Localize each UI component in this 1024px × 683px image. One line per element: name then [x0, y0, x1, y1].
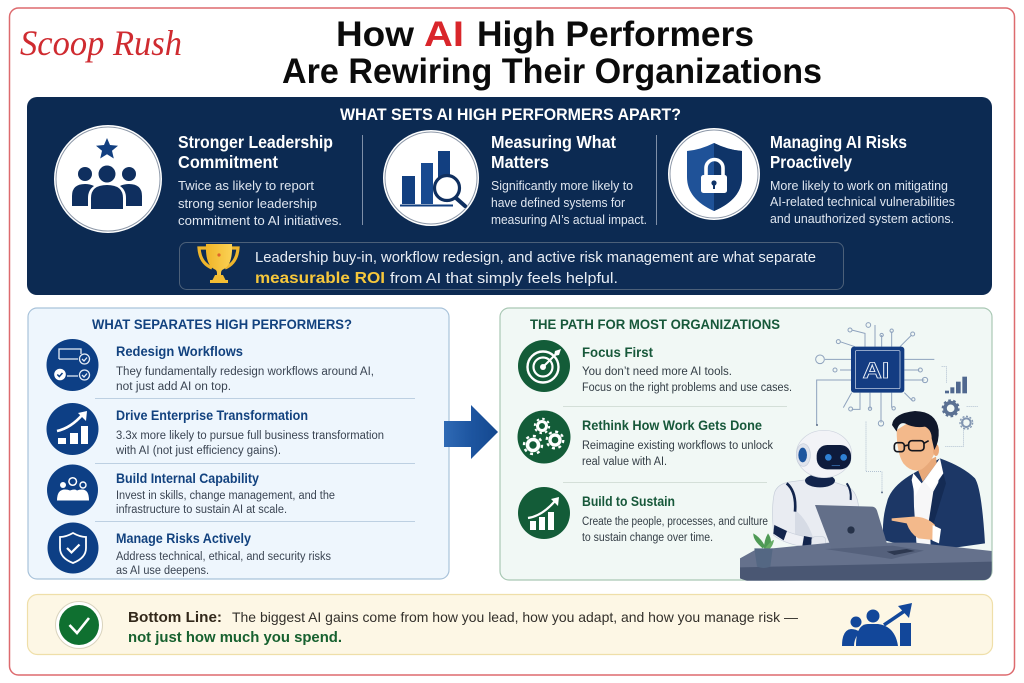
- item: drive enterprise transformation: with AI (not just efficiency gains).: [115, 445, 281, 457]
- title: [282, 15, 822, 91]
- icon: growth chart: [518, 487, 570, 539]
- bottom line text: [128, 609, 798, 646]
- item: build to sustain: Build to Sustain: [582, 493, 675, 509]
- block: stronger leadership commitment: strong senior leadership: [178, 196, 317, 211]
- item: build internal capability: infrastructure to sustain AI at scale.: [116, 504, 287, 516]
- mini bars: [945, 377, 967, 393]
- chip: [851, 347, 904, 393]
- illustration: robot and businessman with AI chip: AI: [863, 358, 889, 383]
- callout: measurable ROI: from AI that simply feels helpful.: [390, 270, 618, 287]
- icon: target: [518, 340, 570, 392]
- icon: trophy: [199, 244, 238, 283]
- block: stronger leadership commitment: Commitment: [178, 152, 278, 172]
- block: managing AI risks proactively: More likely to work on mitigating: [770, 178, 948, 193]
- item: build to sustain: Create the people, processes, and culture: [582, 516, 768, 528]
- item: focus first: [582, 344, 792, 394]
- panel: what sets AI high performers apart: [27, 97, 992, 295]
- icon: shield check: [48, 522, 98, 574]
- title: Are Rewiring Their Organizations: [282, 52, 822, 91]
- item: rethink how work gets done: real value with AI.: [582, 456, 667, 468]
- item: build internal capability: [116, 471, 335, 516]
- item: manage risks actively: as AI use deepens.: [116, 565, 209, 577]
- icon: bar chart with magnifier: [383, 130, 479, 226]
- icon: team: [47, 464, 98, 516]
- title: High Performers: [477, 15, 754, 54]
- panel: what separates high performers: [28, 308, 449, 579]
- item: build to sustain: to sustain change over time.: [582, 532, 713, 544]
- item: manage risks actively: [116, 531, 331, 577]
- icon: check mark: [56, 602, 102, 648]
- item: manage risks actively: Address technical, ethical, and security risks: [116, 551, 331, 563]
- item: build internal capability: Build Internal Capability: [116, 471, 259, 486]
- item: drive enterprise transformation: [115, 408, 384, 457]
- plant: [753, 533, 774, 568]
- block: managing AI risks proactively: and unauthorized system actions.: [770, 211, 954, 226]
- callout: measurable ROI: [180, 242, 844, 290]
- item: rethink how work gets done: Reimagine existing workflows to unlock: [582, 440, 773, 452]
- icon: growth chart: [46, 403, 98, 455]
- block: measuring what matters: measuring AI’s actual impact.: [491, 212, 647, 227]
- item: rethink how work gets done: Rethink How Work Gets Done: [582, 417, 762, 433]
- item: drive enterprise transformation: 3.3x more likely to pursue full business transformation: [116, 430, 384, 442]
- block: measuring what matters: Measuring What: [491, 132, 616, 152]
- block: stronger leadership commitment: Stronger Leadership: [178, 132, 333, 152]
- circuit lines: [816, 323, 978, 492]
- item: focus first: You don’t need more AI tools.: [582, 366, 732, 378]
- icon: gears: [518, 410, 570, 464]
- bottom line text: not just how much you spend.: [128, 630, 342, 646]
- callout: measurable ROI: measurable ROI: [255, 270, 385, 287]
- icon: team growth: [842, 603, 912, 646]
- heading: THE PATH FOR MOST ORGANIZATIONS: [530, 317, 780, 332]
- block: managing AI risks proactively: Managing AI Risks: [770, 132, 907, 152]
- item: redesign workflows: [116, 344, 374, 393]
- block: stronger leadership commitment: [178, 132, 342, 228]
- robot: [773, 430, 859, 548]
- block: measuring what matters: Significantly more likely to: [491, 178, 633, 193]
- heading: WHAT SEPARATES HIGH PERFORMERS?: [92, 317, 352, 332]
- item: redesign workflows: not just add AI on top.: [116, 381, 231, 393]
- item: redesign workflows: They fundamentally redesign workflows around AI,: [116, 366, 374, 378]
- block: managing AI risks proactively: [770, 132, 955, 226]
- title: How: [336, 15, 415, 54]
- block: stronger leadership commitment: Twice as likely to report: [178, 178, 314, 193]
- bottom line text: Bottom Line:: [128, 609, 222, 626]
- block: stronger leadership commitment: commitment to AI initiatives.: [178, 213, 342, 228]
- arrow: [444, 405, 498, 459]
- panel: the path for most organizations: [500, 308, 992, 581]
- bottom line text: The biggest AI gains come from how you lead, how you adapt, and how you manage risk —: [232, 609, 798, 625]
- laptop: [815, 505, 924, 559]
- title: AI: [424, 15, 464, 54]
- item: redesign workflows: Redesign Workflows: [116, 344, 243, 359]
- block: managing AI risks proactively: Proactively: [770, 152, 852, 172]
- panel heading: WHAT SETS AI HIGH PERFORMERS APART?: [340, 106, 681, 124]
- illustration: robot and businessman with AI chip: [740, 323, 992, 581]
- item: focus first: Focus First: [582, 344, 653, 360]
- gears: [945, 403, 956, 414]
- item: focus first: Focus on the right problems and use cases.: [582, 382, 792, 394]
- icon: leadership team with star: [54, 125, 162, 233]
- table: [740, 543, 992, 581]
- block: measuring what matters: [491, 132, 647, 227]
- icon: workflow: [46, 339, 98, 391]
- item: build to sustain: [582, 493, 768, 544]
- panel: bottom line: [28, 594, 992, 654]
- item: build internal capability: Invest in skills, change management, and the: [116, 490, 335, 502]
- block: managing AI risks proactively: AI-related technical vulnerabilities: [770, 194, 955, 209]
- item: manage risks actively: Manage Risks Actively: [116, 531, 251, 546]
- logo: Scoop Rush: Scoop Rush: [20, 23, 182, 63]
- callout: measurable ROI: Leadership buy-in, workflow redesign, and active risk management are what separate: [255, 249, 816, 266]
- icon: shield with padlock: [668, 128, 760, 220]
- block: measuring what matters: Matters: [491, 152, 549, 172]
- block: measuring what matters: have defined systems for: [491, 195, 626, 210]
- man: [883, 411, 985, 552]
- item: drive enterprise transformation: Drive Enterprise Transformation: [116, 408, 308, 423]
- item: rethink how work gets done: [582, 417, 773, 468]
